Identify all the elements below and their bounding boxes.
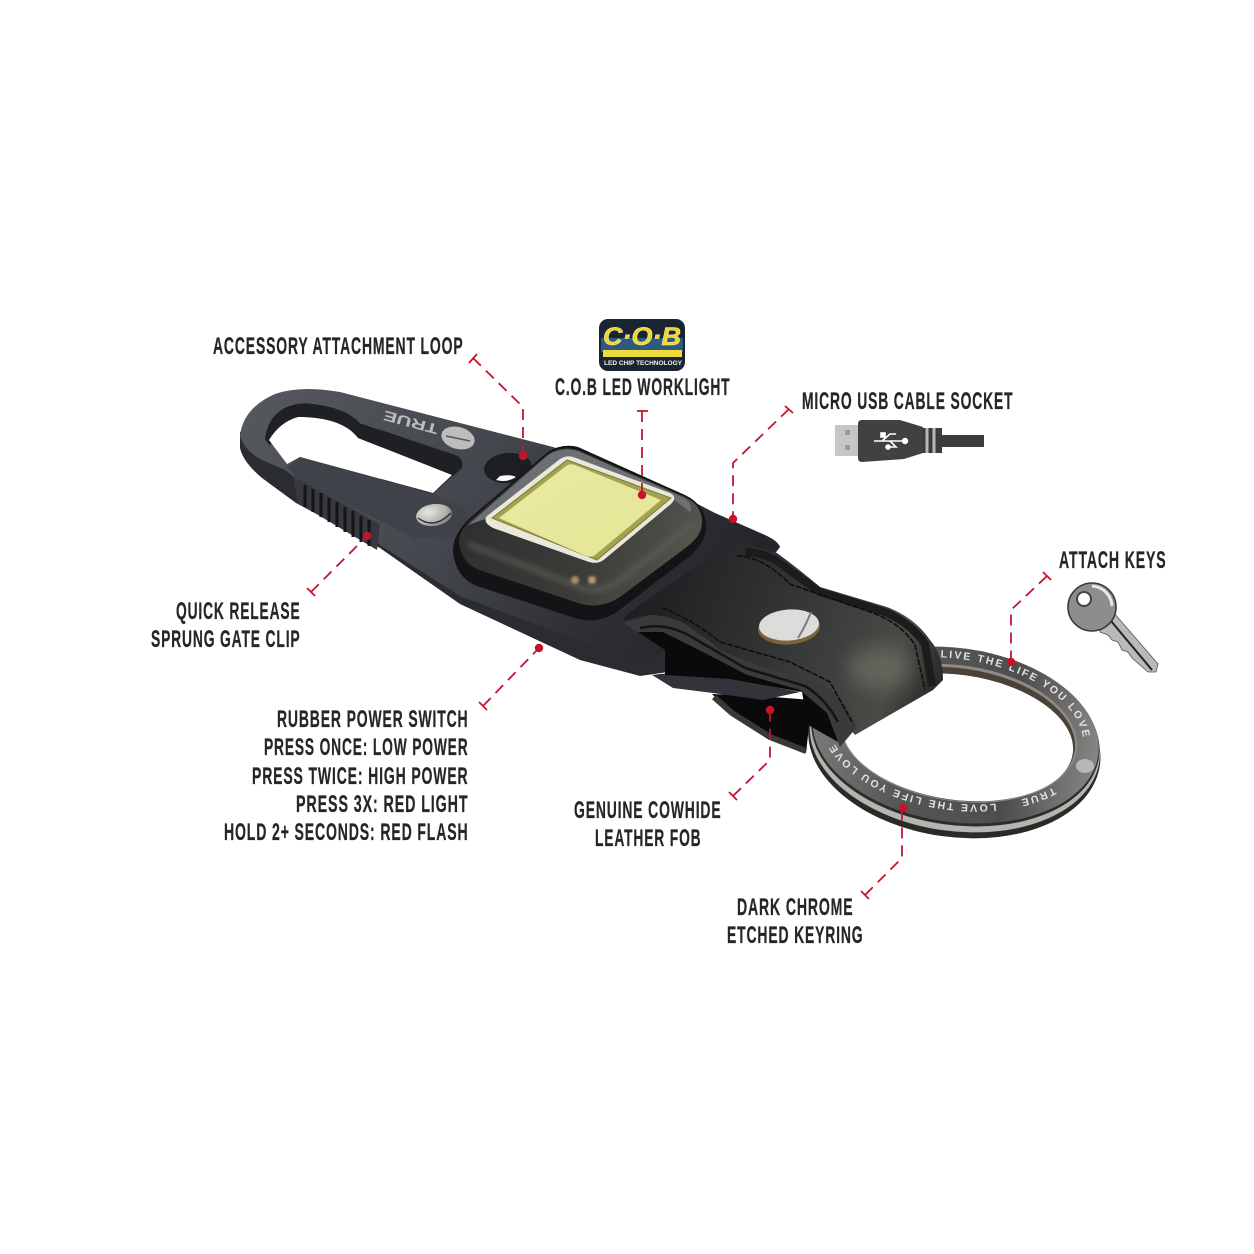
ring logo [1076, 759, 1094, 773]
icon: COB badge [599, 319, 685, 371]
text block: dark chrome etched keyring [727, 894, 864, 949]
key blade [1100, 613, 1158, 672]
leader line: micro USB [729, 406, 793, 523]
product: keychain light [240, 389, 1100, 890]
text block: genuine cowhide leather fob: GENUINE COWHIDE [574, 797, 722, 824]
carabiner opening wall [265, 403, 462, 476]
leader line: quick release [307, 532, 371, 596]
text block: dark chrome etched keyring: DARK CHROME [737, 894, 854, 921]
USB metal plug [835, 425, 862, 456]
text block: dark chrome etched keyring: ETCHED KEYRING [727, 922, 864, 949]
leather top piping [745, 552, 932, 686]
leader line: COB worklight [637, 411, 648, 499]
USB cable [938, 435, 984, 447]
icon: key [1068, 583, 1158, 672]
engraved brand: TRUE [382, 408, 440, 438]
sprung gate clip [287, 457, 468, 538]
lamp highlights [571, 576, 596, 584]
lamp side highlight [468, 524, 692, 590]
carabiner opening [269, 417, 452, 493]
key head [1068, 583, 1116, 631]
clear lens rim [485, 456, 674, 563]
etched keyring: TRUE [1022, 788, 1057, 806]
leather stitching [662, 556, 925, 722]
leather rivet [757, 607, 821, 647]
etched keyring [808, 646, 1100, 838]
leather bound lip [623, 615, 857, 747]
text block: rubber power switch modes: PRESS ONCE: LOW POWER [264, 734, 468, 761]
text block: rubber power switch modes: RUBBER POWER SWITCH [277, 706, 468, 733]
icon: COB badge: C·O·B [603, 323, 681, 351]
leather fob rear [712, 694, 812, 753]
leather loop dark interior [638, 622, 852, 743]
text block: genuine cowhide leather fob [574, 797, 722, 852]
heading label: attach keys: ATTACH KEYS [1059, 547, 1166, 574]
leather fob front [623, 543, 943, 747]
leader line: accessory loop [469, 354, 527, 460]
text block: quick release sprung gate clip: QUICK RELEASE [176, 598, 300, 625]
LED chip [499, 464, 661, 557]
leather sheen [848, 646, 912, 690]
heading label: accessory attachment loop: ACCESSORY ATTACHMENT LOOP [213, 333, 464, 360]
etched keyring: LOVE THE LIFE YOU LOVE [829, 744, 996, 812]
lamp mottled top [459, 448, 702, 605]
leader line: leather fob [729, 706, 774, 800]
key hole [1077, 592, 1091, 606]
USB strain relief [922, 428, 942, 453]
carabiner top face [240, 389, 780, 661]
leather lower strap [652, 674, 800, 700]
text block: rubber power switch modes [224, 706, 468, 846]
icon: USB cable [835, 420, 984, 462]
lamp outer shell [453, 446, 706, 620]
leader line: attach keys [1007, 572, 1051, 666]
USB plug body [858, 420, 923, 462]
heading label: micro USB cable socket: MICRO USB CABLE SOCKET [802, 388, 1014, 415]
lens glass band [492, 460, 671, 560]
attachment loop hole [483, 451, 533, 485]
text block: genuine cowhide leather fob: LEATHER FOB [595, 825, 702, 852]
leader line: power switch [479, 644, 543, 710]
engraved brand [382, 408, 477, 453]
text block: quick release sprung gate clip: SPRUNG GATE CLIP [151, 626, 300, 653]
text block: rubber power switch modes: PRESS TWICE: HIGH POWER [252, 763, 468, 790]
heading label: COB LED worklight: C.O.B LED WORKLIGHT [555, 374, 730, 401]
text block: quick release sprung gate clip [151, 598, 300, 653]
icon: COB badge: LED CHIP TECHNOLOGY [604, 361, 682, 367]
COB lamp housing [453, 446, 706, 620]
text block: rubber power switch modes: PRESS 3X: RED LIGHT [296, 791, 468, 818]
gate ribbed grip [293, 477, 380, 550]
leader line: keyring [861, 804, 907, 899]
USB trident symbol [874, 433, 907, 449]
carabiner underside [240, 420, 780, 676]
text block: rubber power switch modes: HOLD 2+ SECONDS: RED FLASH [224, 819, 468, 846]
clear glass bezel [468, 449, 691, 525]
gate rivet [415, 502, 453, 528]
leather body [623, 543, 943, 735]
ring etched lettering: LIVE THE LIFE YOU LOVE [941, 650, 1090, 737]
